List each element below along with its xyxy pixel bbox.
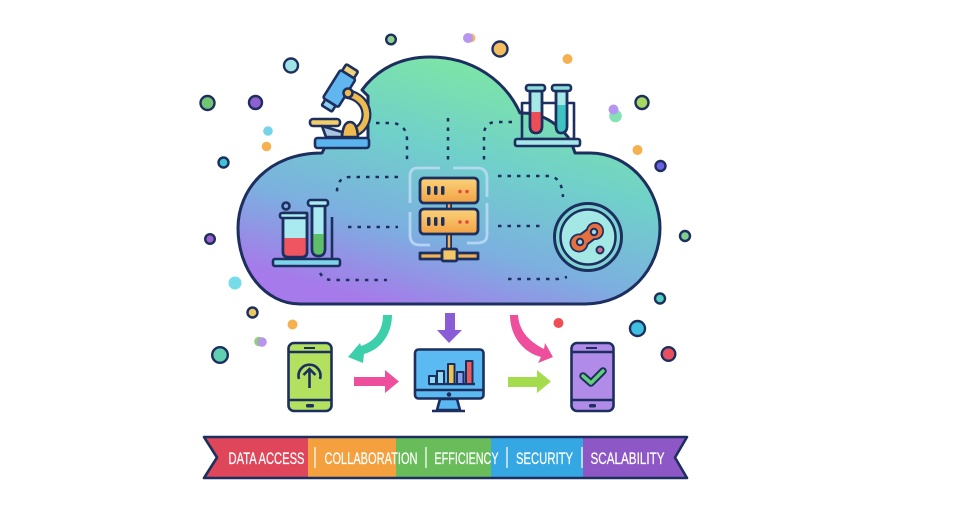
icon: phone upload [288,343,332,411]
ribbon segment: collaboration [308,437,396,478]
dashed connectors [320,118,567,280]
ribbon segment: scalability [583,437,687,478]
arrow: pink curved [510,315,553,363]
ribbon segment: efficiency [396,437,491,478]
ribbon separators [315,447,582,468]
ribbon banner [204,437,687,478]
arrow: green straight [508,370,551,393]
icon: beaker and tube left [273,200,340,266]
icon: microscope [310,63,369,148]
icon: server [410,168,487,261]
ribbon segment: data access [204,437,308,478]
label: scalability: SCALABILITY [590,449,664,468]
arrow: teal curved [348,315,392,363]
arrow: pink straight [354,370,399,393]
ribbon outline [204,437,687,478]
ribbon segment: security [491,437,583,478]
label: security: SECURITY [516,449,573,468]
arrow: purple down [437,313,462,343]
icon: test tubes top right [515,85,580,146]
decorative outlined dots [200,35,690,363]
icon: phone check [572,343,614,411]
label: efficiency: EFFICIENCY [434,449,498,468]
label: collaboration: COLLABORATION [324,449,418,468]
label: data access: DATA ACCESS [228,449,304,468]
decorative filled dots [228,33,642,347]
icon: petri dish [554,204,622,270]
icon: monitor chart [415,350,484,411]
server brackets [410,168,487,245]
cloud [238,57,660,304]
